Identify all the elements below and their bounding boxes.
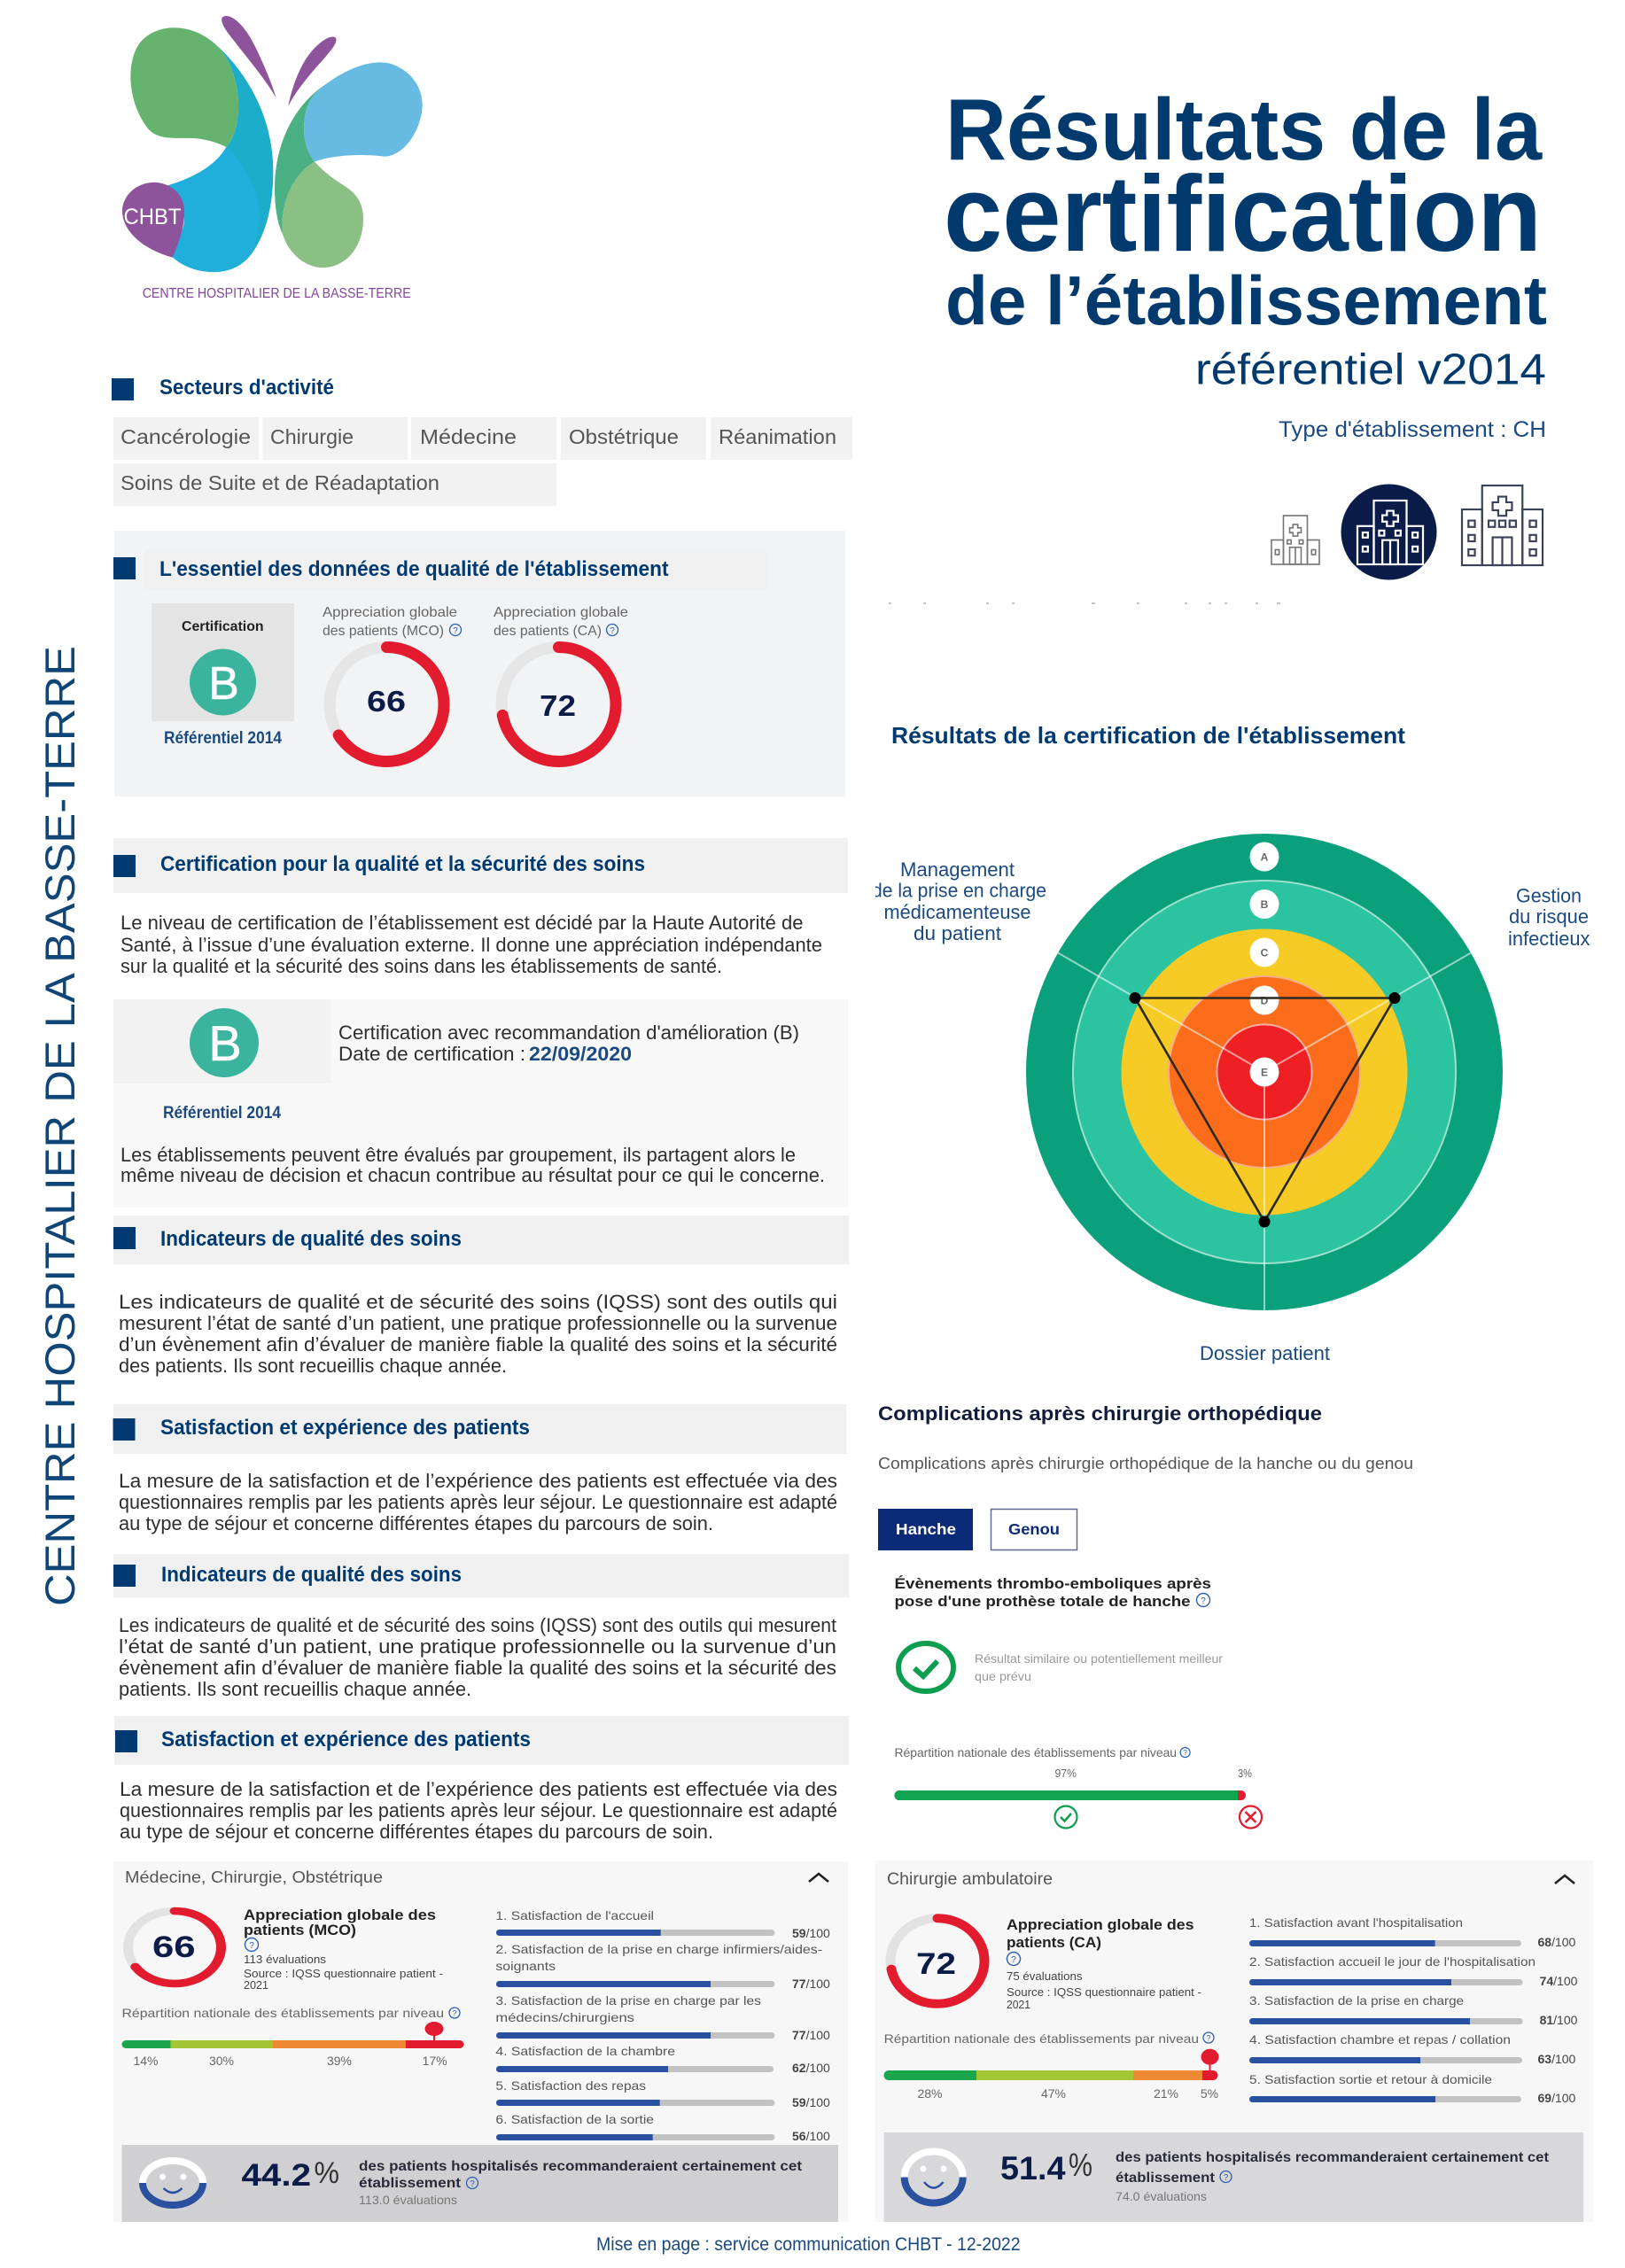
heading: satisfaction: Satisfaction et expérience des patients (160, 1416, 530, 1440)
level markers A to E: E (1261, 1067, 1268, 1079)
grouping note: Les établissements peuvent être évalués par groupement, ils partagent alors le (121, 1144, 796, 1166)
certification badge (152, 603, 294, 748)
score triangle (1129, 992, 1400, 1228)
national distribution (884, 2031, 1219, 2101)
gauge 66 (128, 1911, 222, 1984)
badge B (190, 1008, 259, 1077)
national distribution bar: 97% (1054, 1767, 1077, 1780)
certification badge: B (208, 658, 239, 710)
national distribution: ? (1206, 2034, 1211, 2043)
recommendation band (122, 2145, 838, 2222)
indicator title: thrombo-emboliques: Évènements thrombo-emboliques après (895, 1575, 1211, 1592)
gauge: appréciation MCO 66: des patients (MCO) (323, 624, 444, 639)
national distribution: 39% (327, 2054, 352, 2068)
chevron (1555, 1876, 1574, 1884)
activity sector chips: Soins de Suite et de Réadaptation (121, 471, 439, 494)
satisfaction bars: 1. Satisfaction avant l'hospitalisation (1249, 1915, 1463, 1930)
gauge: appréciation MCO 66: ? (453, 626, 458, 636)
indicator title: thrombo-emboliques (895, 1575, 1211, 1610)
heading: certification pour la qualité (113, 838, 848, 893)
icon: small check (1054, 1806, 1077, 1829)
activity sector chips: Chirurgie (270, 425, 354, 448)
icon: smiley (143, 2161, 203, 2205)
heading: certification pour la qualité: Certification pour la qualité et la sécurité des soins (160, 852, 645, 876)
panel: ambulatory surgery satisfaction (875, 1860, 1593, 2222)
panel: ambulatory surgery satisfaction: Chirurgie ambulatoire (887, 1870, 1053, 1889)
recommendation band: % (1069, 2147, 1092, 2183)
score description: 2021 (1007, 1998, 1030, 2011)
national distribution bar (895, 1745, 1262, 1829)
main title: de l’établissement (945, 261, 1547, 339)
text block: satisfaction: au type de séjour et concerne différentes étapes du parcours de soin. (119, 1512, 713, 1534)
label: gestion du risque infectieux: Gestion (1516, 885, 1582, 907)
satisfaction bars: 5. Satisfaction des repas (495, 2078, 646, 2093)
logo: CHBT butterfly: CHBT (124, 205, 181, 229)
label: management médicamenteuse (868, 858, 1046, 944)
referential label: Référentiel 2014 (163, 1104, 281, 1122)
icon: large hospital (1462, 485, 1543, 565)
heading: complications: Complications après chirurgie orthopédique (878, 1402, 1322, 1425)
text block: certification intro: Le niveau de certification de l’établissement est décidé par la Haute Autorité de (121, 912, 803, 934)
text block: satisfaction (119, 1470, 837, 1534)
score description: ? (1011, 1955, 1016, 1965)
gauge: appréciation CA 72: des patients (CA) (494, 624, 602, 639)
satisfaction bars: 56/100 (792, 2129, 830, 2143)
satisfaction bars: 1. Satisfaction de l'accueil (495, 1908, 654, 1922)
level markers A to E: C (1261, 946, 1269, 959)
certification level text (338, 1021, 799, 1065)
satisfaction bars: 3. Satisfaction de la prise en charge (1249, 1993, 1464, 2008)
vertical title: CENTRE HOSPITALIER DE LA BASSE-TERRE (36, 646, 83, 1606)
score description: 75 évaluations (1007, 1969, 1083, 1983)
satisfaction bars: soignants (495, 1959, 556, 1973)
text block: satisfaction: questionnaires remplis par les patients après leur séjour. Le questionnaire est adapté (119, 1491, 837, 1513)
score description: 2021 (244, 1978, 268, 1992)
satisfaction bars: 81/100 (1540, 2013, 1578, 2027)
tab: Genou: Genou (1008, 1520, 1060, 1538)
establishment type: Type d'établissement : CH (1279, 417, 1546, 442)
certification level text: Certification avec recommandation d'amélioration (B) (338, 1021, 799, 1044)
satisfaction bars: 3. Satisfaction de la prise en charge par les (495, 1993, 761, 2008)
gauge 72: 72 (916, 1947, 956, 1981)
main title: Résultats de la (945, 81, 1543, 178)
gauge: appréciation CA 72 (494, 605, 628, 762)
result text: Résultat similaire ou potentiellement meilleur (975, 1651, 1223, 1666)
panel: MCO satisfaction: Médecine, Chirurgie, Obstétrique (125, 1868, 383, 1886)
heading: satisfaction (2) (114, 1716, 849, 1765)
text block: indicateurs (2): évènement afin d’évaluer de manière fiable la qualité des soins et la sécurité des (119, 1657, 836, 1679)
satisfaction bars: 68/100 (1538, 1935, 1576, 1949)
certification level text: Date de certification : (338, 1043, 525, 1065)
label: gestion du risque infectieux: infectieux (1508, 928, 1590, 950)
label: dossier patient: Dossier patient (1200, 1342, 1330, 1364)
satisfaction bars (1249, 1915, 1578, 2105)
activity sector chips (113, 417, 852, 506)
text block: satisfaction: La mesure de la satisfaction et de l’expérience des patients est effectuée via des (119, 1470, 837, 1492)
gauge 72 (890, 1918, 984, 2004)
gauge: appréciation CA 72: ? (610, 626, 615, 636)
complications subtitle: Complications après chirurgie orthopédique de la hanche ou du genou (878, 1454, 1413, 1472)
main title (944, 81, 1547, 339)
satisfaction bars: 59/100 (792, 2095, 830, 2109)
text block: indicateurs (2): Les indicateurs de qualité et de sécurité des soins (IQSS) sont des outils qui mesurent (119, 1614, 836, 1636)
result text (975, 1651, 1223, 1683)
score description: ? (249, 1941, 254, 1951)
national distribution: 28% (917, 2086, 943, 2101)
satisfaction bars: 4. Satisfaction chambre et repas / collation (1249, 2032, 1511, 2047)
certification level text: 22/09/2020 (529, 1043, 632, 1065)
satisfaction bars: 4. Satisfaction de la chambre (495, 2044, 675, 2058)
tab: Genou (991, 1510, 1077, 1550)
text block: indicateurs (119, 1291, 837, 1377)
gauge: appréciation CA 72: 72 (540, 689, 576, 722)
satisfaction bars: 2. Satisfaction de la prise en charge infirmiers/aides- (495, 1942, 822, 1956)
footer credit: Mise en page : service communication CHBT - 12-2022 (596, 2234, 1021, 2255)
heading: secteurs d'activité: Secteurs d'activité (159, 376, 334, 400)
logo: CHBT butterfly: CENTRE HOSPITALIER DE LA BASSE-TERRE (143, 286, 411, 301)
heading: satisfaction (113, 1404, 846, 1454)
label: management médicamenteuse: du patient (914, 922, 1001, 944)
icon: green check result (898, 1643, 953, 1691)
recommendation band: établissement (359, 2176, 462, 2191)
gauge: appréciation CA 72: Appreciation globale (494, 605, 628, 620)
activity sector chips: Cancérologie (121, 425, 251, 448)
recommendation band: % (314, 2156, 339, 2190)
subtitle: référentiel: référentiel v2014 (1195, 346, 1546, 393)
gauge: appréciation MCO 66: 66 (367, 685, 406, 718)
activity sector chips: Obstétrique (569, 425, 679, 448)
satisfaction bars: 59/100 (792, 1926, 830, 1940)
satisfaction bars: 62/100 (792, 2061, 830, 2075)
badge B: B (208, 1015, 242, 1071)
recommendation band (884, 2132, 1583, 2222)
label: gestion du risque infectieux: du risque (1509, 905, 1589, 928)
score description (1007, 1916, 1201, 2011)
satisfaction bars: 69/100 (1538, 2091, 1576, 2105)
activity sector chips: Médecine (420, 425, 517, 448)
heading: indicateurs de qualité (2): Indicateurs de qualité des soins (161, 1563, 462, 1587)
score description: Appreciation globale des (1007, 1916, 1194, 1933)
recommendation band: établissement (1116, 2171, 1216, 2186)
level markers A to E: A (1261, 850, 1269, 863)
tab: Hanche (878, 1509, 973, 1550)
score description (244, 1907, 443, 1992)
icon: small hospital (1271, 516, 1319, 564)
heading: résultats de la certification: Résultats de la certification de l'établissement (891, 722, 1405, 749)
gauge: appréciation MCO 66: Appreciation globale (323, 605, 457, 620)
text block: indicateurs: mesurent l’état de santé d’un patient, une pratique professionnelle ou la survenue (119, 1312, 837, 1334)
level markers A to E (1249, 842, 1279, 1086)
text block: satisfaction (2): La mesure de la satisfaction et de l’expérience des patients est effectuée via des (120, 1778, 837, 1800)
result text: que prévu (975, 1669, 1031, 1683)
text block: indicateurs: Les indicateurs de qualité et de sécurité des soins (IQSS) sont des outils qui (119, 1291, 837, 1313)
text block: satisfaction (2): questionnaires remplis par les patients après leur séjour. Le questionnaire est adapté (120, 1799, 837, 1821)
heading: indicateurs de qualité: Indicateurs de qualité des soins (160, 1227, 462, 1251)
recommendation band: 51.4 (1000, 2150, 1066, 2186)
heading: indicateurs de qualité (113, 1216, 849, 1264)
tab: Hanche: Hanche (896, 1520, 956, 1538)
panel: essentiel des données (113, 531, 845, 796)
icon: hospital in dark circle (1341, 484, 1437, 579)
recommendation band: 44.2 (241, 2158, 311, 2193)
icon: smiley (905, 2152, 963, 2202)
indicator title: thrombo-emboliques: ? (1201, 1596, 1206, 1606)
recommendation band: des patients hospitalisés recommanderaient certainement cet (1116, 2150, 1550, 2165)
certification badge: Référentiel 2014 (164, 729, 282, 748)
icon: small cross (1240, 1806, 1262, 1829)
national distribution: 14% (133, 2054, 159, 2068)
score description: Source : IQSS questionnaire patient - (244, 1967, 443, 1980)
satisfaction bars: 74/100 (1540, 1974, 1578, 1988)
text block: satisfaction (2): au type de séjour et concerne différentes étapes du parcours de soin. (120, 1821, 713, 1843)
heading: essentiel (113, 550, 767, 590)
national distribution: ? (452, 2009, 457, 2018)
text block: certification intro: Santé, à l’issue d’une évaluation externe. Il donne une appréciation indépendante (121, 934, 822, 956)
national distribution: 30% (209, 2054, 234, 2068)
national distribution (122, 2006, 464, 2068)
label: management médicamenteuse: médicamenteuse (884, 901, 1031, 923)
satisfaction bars: 6. Satisfaction de la sortie (495, 2112, 654, 2126)
recommendation band: 113.0 évaluations (359, 2193, 457, 2207)
national distribution bar: ? (1183, 1749, 1187, 1757)
national distribution: 17% (423, 2054, 447, 2068)
satisfaction bars: 63/100 (1538, 2052, 1576, 2066)
national distribution: 47% (1041, 2086, 1066, 2101)
recommendation band: ? (470, 2179, 475, 2189)
score description: 113 évaluations (244, 1953, 327, 1966)
satisfaction bars: 2. Satisfaction accueil le jour de l'hospitalisation (1249, 1954, 1536, 1969)
score description: patients (MCO) (244, 1922, 356, 1938)
heading: indicateurs de qualité (2) (113, 1554, 849, 1597)
certification badge: Certification (182, 619, 264, 634)
heading: satisfaction (2): Satisfaction et expérience des patients (161, 1728, 531, 1751)
logo: CHBT butterfly (122, 16, 423, 301)
level markers A to E: B (1261, 898, 1269, 911)
text block: indicateurs (2) (119, 1614, 836, 1700)
recommendation band: 74.0 évaluations (1116, 2189, 1207, 2203)
satisfaction bars: médecins/chirurgiens (495, 2010, 634, 2024)
satisfaction bars: 77/100 (792, 1977, 830, 1991)
score description: Appreciation globale des (244, 1907, 436, 1923)
score description: patients (CA) (1007, 1934, 1101, 1951)
panel: certification result (113, 999, 848, 1208)
label: gestion du risque infectieux (1508, 885, 1590, 950)
label: management médicamenteuse: Management (900, 858, 1015, 881)
satisfaction bars: 77/100 (792, 2028, 830, 2042)
chart: target diagram (1026, 834, 1503, 1316)
gauge 66: 66 (152, 1930, 196, 1964)
national distribution: Répartition nationale des établissements par niveau (884, 2031, 1199, 2046)
text block: indicateurs: d’un évènement afin d’évaluer de manière fiable la qualité des soins et la sécurité (119, 1333, 837, 1355)
text block: indicateurs (2): patients. Ils sont recueillis chaque année. (119, 1678, 471, 1700)
national distribution bar: 3% (1238, 1767, 1252, 1780)
chevron (809, 1874, 828, 1882)
recommendation band: ? (1224, 2173, 1229, 2183)
grouping note (121, 1144, 825, 1186)
satisfaction bars (495, 1908, 830, 2143)
activity sector chips: Réanimation (719, 425, 836, 448)
score description: Source : IQSS questionnaire patient - (1007, 1985, 1201, 1999)
text block: indicateurs (2): l’état de santé d’un patient, une pratique professionnelle ou la survenue d’un (119, 1635, 836, 1658)
main title: certification (944, 153, 1542, 274)
national distribution: 5% (1201, 2086, 1218, 2101)
text block: indicateurs: des patients. Ils sont recueillis chaque année. (119, 1355, 507, 1377)
label: management médicamenteuse: de la prise en charge (872, 880, 1046, 902)
heading: essentiel: L'essentiel des données de qualité de l'établissement (159, 557, 668, 581)
panel: MCO satisfaction (113, 1861, 848, 2222)
national distribution bar: Répartition nationale des établissements par niveau (895, 1745, 1177, 1759)
text block: certification intro (121, 912, 822, 977)
satisfaction bars: 5. Satisfaction sortie et retour à domicile (1249, 2072, 1492, 2086)
national distribution: Répartition nationale des établissements par niveau (122, 2006, 444, 2020)
level markers A to E: D (1261, 994, 1269, 1006)
text block: certification intro: sur la qualité et la sécurité des soins dans les établissements de santé. (121, 955, 722, 977)
grouping note: même niveau de décision et chacun contribue au résultat pour ce qui le concerne. (121, 1164, 825, 1186)
indicator title: thrombo-emboliques: pose d'une prothèse totale de hanche (895, 1593, 1191, 1610)
national distribution: 21% (1154, 2086, 1178, 2101)
recommendation band: des patients hospitalisés recommanderaient certainement cet (359, 2159, 803, 2174)
text block: satisfaction (2) (120, 1778, 837, 1843)
gauge: appréciation MCO 66 (323, 605, 461, 762)
